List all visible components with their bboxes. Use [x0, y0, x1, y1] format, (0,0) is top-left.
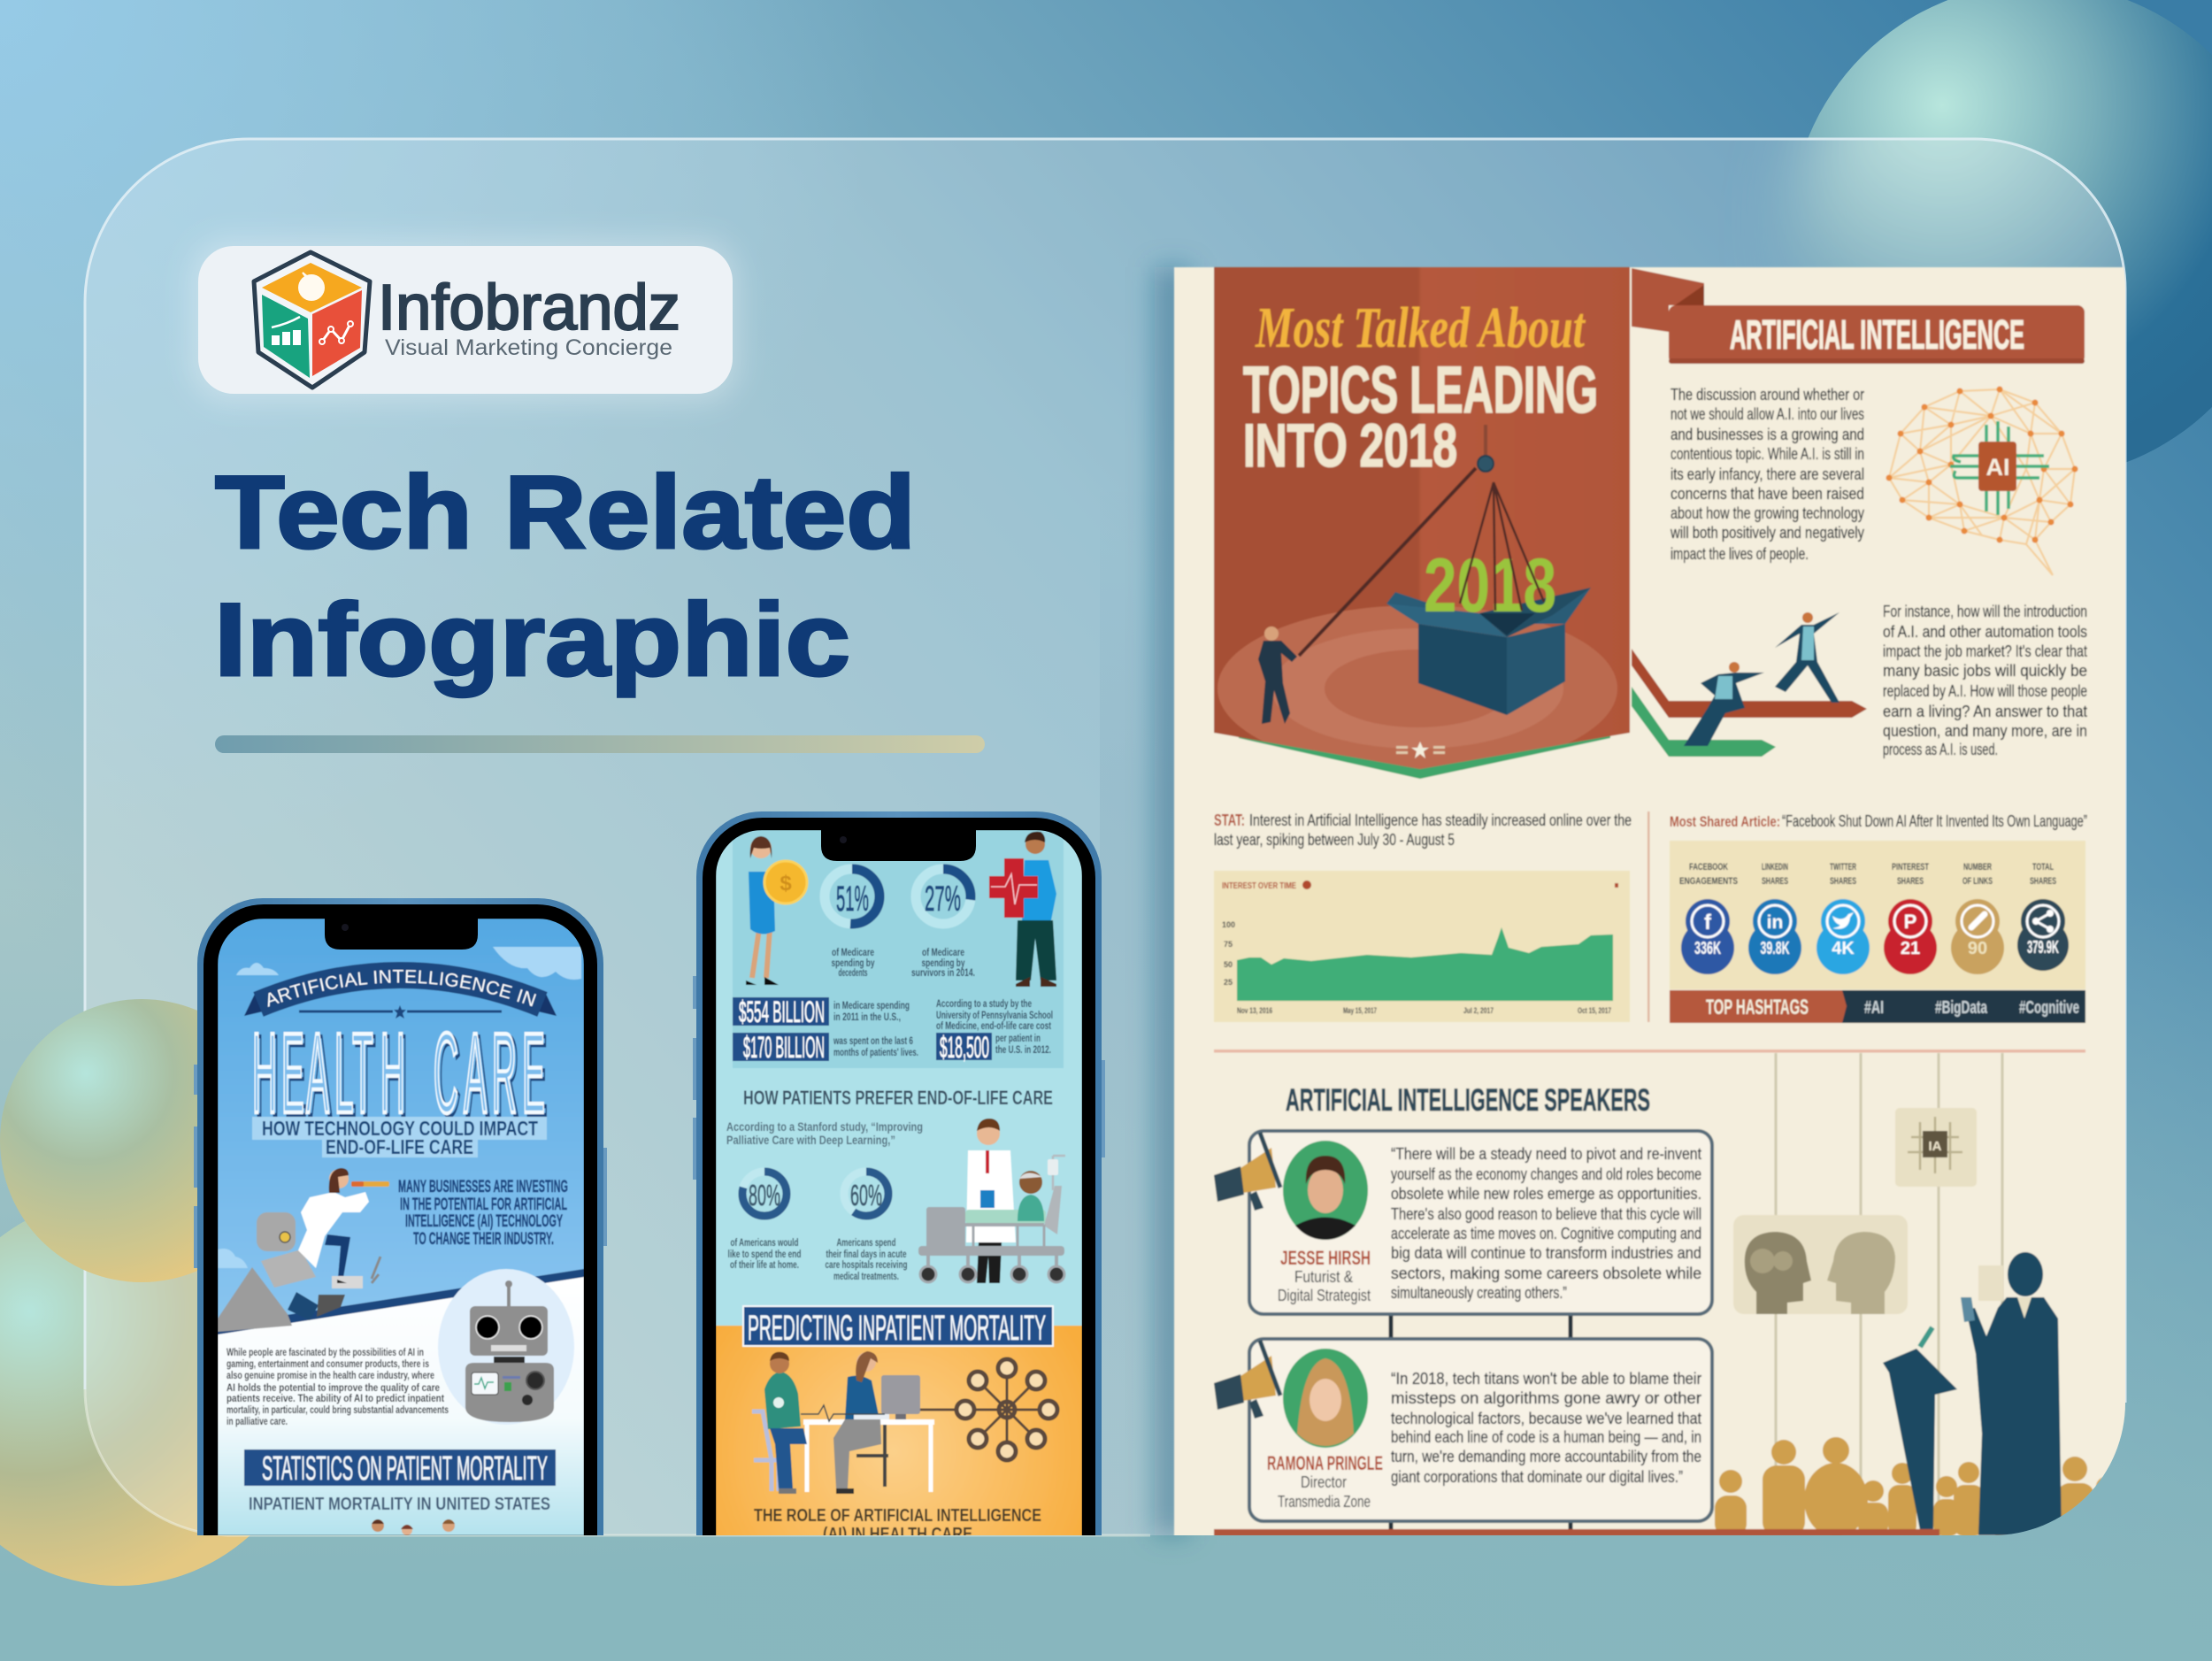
donut: 27 percent: 27% [925, 880, 961, 919]
stat: 170 billion: $170 BILLION [743, 1031, 825, 1065]
runner: rear [1684, 662, 1764, 746]
speaker card: Jesse Hirsh [1214, 1131, 1712, 1314]
share: pinterest: 21 [1901, 939, 1920, 958]
stat: 170 billion: was spent on the last 6 [833, 1034, 913, 1047]
stat text: STAT: [1214, 811, 1245, 829]
donut captions [832, 946, 975, 979]
role of AI heading: (AI) IN HEALTH CARE [823, 1525, 972, 1544]
paragraph: intro: not we should allow A.I. into our lives [1671, 405, 1864, 423]
paragraph: AI holds the potential to improve the quality of care [227, 1381, 440, 1394]
predicting heading [743, 1306, 1053, 1348]
interest over time chart: 50 [1224, 960, 1233, 969]
quote: “There will be a steady need to pivot and re-invent [1391, 1145, 1701, 1163]
intro caps text: IN THE POTENTIAL FOR ARTIFICIAL [400, 1196, 567, 1214]
interest over time chart: Jul 2, 2017 [1463, 1006, 1494, 1015]
quote: technological factors, because we've learned that [1391, 1410, 1701, 1427]
paragraph: for instance: impact the job market? It's clear that [1883, 642, 2087, 660]
quote: “In 2018, tech titans won't be able to blame their [1391, 1370, 1701, 1388]
quote: turn, we're demanding more accountability from the [1391, 1448, 1701, 1465]
quote [1391, 1370, 1701, 1486]
interest over time chart: INTEREST OVER TIME [1222, 881, 1296, 891]
robot head badge [438, 1269, 574, 1425]
donut: 80 percent [742, 1172, 787, 1216]
stanford text: According to a Stanford study, “Improving [726, 1119, 923, 1134]
paragraph: intro [1670, 386, 1864, 563]
share: total: SHARES [2030, 876, 2056, 887]
share: facebook: ENGAGEMENTS [1679, 876, 1738, 887]
speaker name: Transmedia Zone [1278, 1493, 1371, 1511]
phone: health care infographic [194, 898, 607, 1535]
interest over time chart: 75 [1224, 940, 1233, 949]
stat: 18,500: According to a study by the [936, 997, 1032, 1010]
title [214, 454, 916, 697]
grey robot arm [218, 1212, 345, 1332]
speaker name [1278, 1247, 1371, 1304]
clouds [218, 947, 581, 1268]
megaphone [1214, 1341, 1280, 1419]
phone side buttons [693, 976, 1105, 1180]
logo icon: cube hexagon [254, 252, 370, 388]
donut captions: spending by [922, 957, 965, 969]
stanford text [726, 1119, 923, 1147]
share: total: 379.9K [2027, 938, 2059, 957]
subtitle: HOW TECHNOLOGY COULD IMPACT [262, 1117, 538, 1140]
logo wordmark: Infobrandz [378, 273, 680, 343]
speaker name: Digital Strategist [1278, 1287, 1371, 1304]
donut: 51 percent: 51% [836, 880, 869, 919]
paragraph: gaming, entertainment and consumer products, there is [227, 1357, 429, 1370]
stat: 18,500: University of Pennsylvania School [936, 1009, 1053, 1021]
phone screen [716, 830, 1082, 1544]
pulley and ropes [1299, 425, 1544, 656]
small people heads [372, 1519, 455, 1535]
sphere: lower left [0, 1196, 314, 1586]
paragraph: for instance: of A.I. and other automation tools [1883, 623, 2087, 641]
quote: missteps on algorithms gone awry or other [1391, 1389, 1701, 1407]
share: facebook: FACEBOOK [1689, 862, 1728, 873]
megaphone [1214, 1133, 1280, 1211]
intro caps text: MANY BUSINESSES ARE INVESTING [398, 1178, 568, 1196]
paragraph: intro: about how the growing technology [1671, 504, 1864, 522]
role of AI heading [754, 1506, 1041, 1544]
runner: front [1775, 612, 1839, 703]
paragraph: intro: contentious topic. While A.I. is still in [1671, 445, 1864, 463]
stat: 554 billion: in Medicare spending [833, 999, 910, 1011]
quote: big data will continue to transform industries and [1391, 1244, 1701, 1262]
phone screen: PREDICTING INPATIENT MORTALITY [748, 1309, 1046, 1348]
share: twitter [1816, 862, 1870, 974]
title: Infographic [214, 581, 850, 697]
share: linkedin [1748, 862, 1801, 974]
donut captions [727, 1236, 908, 1282]
paragraph: patients receive. The ability of AI to predict inpatient [227, 1392, 444, 1404]
card bottom-left border [85, 1389, 1150, 1535]
paragraph: for instance: earn a living? An answer to that [1883, 703, 2087, 720]
stat text [1214, 811, 1632, 849]
donut captions: like to spend the end [727, 1248, 802, 1260]
poster headline: TOPICS LEADING [1243, 353, 1598, 427]
most shared article [1670, 812, 2087, 830]
quote: sectors, making some careers obsolete while [1391, 1265, 1701, 1282]
donut captions: Americans spend [837, 1236, 895, 1249]
share: facebook: 336K [1694, 939, 1721, 958]
share: linkedin: in [1767, 912, 1783, 933]
share: links [1951, 862, 2004, 974]
top hashtags bar: #AI [1864, 998, 1884, 1018]
interest over time chart [1214, 871, 1630, 1022]
paragraph: for instance: For instance, how will the introduction [1883, 603, 2087, 620]
phone notch [821, 827, 976, 861]
mortality subheading: INPATIENT MORTALITY IN UNITED STATES [249, 1495, 550, 1514]
stanford text: Palliative Care with Deep Learning,” [726, 1133, 895, 1147]
share: pinterest [1884, 862, 1937, 974]
crowd silhouettes [1715, 1437, 2119, 1537]
sphere: top right [1790, 0, 2212, 479]
statistics heading [244, 1450, 556, 1488]
quote: behind each line of code is a human being — and, in [1391, 1428, 1701, 1446]
logo glow [190, 239, 739, 403]
subtitle [252, 1117, 547, 1158]
role of AI heading: THE ROLE OF ARTIFICIAL INTELLIGENCE [754, 1506, 1041, 1526]
speaker name [1267, 1452, 1383, 1511]
poster: most talked about topics [1174, 267, 2130, 1537]
man with medical cross [989, 832, 1056, 987]
paragraph: for instance [1883, 603, 2087, 758]
share: links: 90 [1968, 939, 1987, 958]
desk scene [752, 1351, 934, 1494]
interest over time chart: May 15, 2017 [1343, 1006, 1377, 1015]
stat text: Interest in Artificial Intelligence has steadily increased online over the [1249, 811, 1632, 829]
hub icon [920, 1359, 1057, 1460]
heads tile [1733, 1215, 1908, 1314]
speaker name: Futurist & [1294, 1268, 1353, 1286]
phone side buttons [194, 1065, 607, 1268]
red banner panel [1214, 267, 1630, 779]
paragraph: also genuine promise in the health care industry, where [227, 1369, 434, 1381]
chip tile [1895, 1108, 1977, 1187]
logo plate [198, 246, 733, 394]
bottom red strip [1214, 1529, 1939, 1536]
share: total: TOTAL [2032, 862, 2054, 873]
quote: There's also good reason to believe that this cycle will [1391, 1205, 1701, 1223]
doctor and patient bed [918, 1119, 1065, 1283]
intro caps text: TO CHANGE THEIR INDUSTRY. [413, 1230, 554, 1249]
most shared article: Most Shared Article: [1670, 813, 1780, 830]
top hashtags bar: #Cognitive [2019, 998, 2079, 1018]
quote: obsolete while new roles emerge as opportunities. [1391, 1185, 1701, 1203]
donut captions: spending by [832, 957, 875, 969]
speaker name: Director [1301, 1473, 1347, 1491]
star divider [299, 1005, 502, 1019]
donut captions: of their life at home. [730, 1258, 799, 1271]
donut: 60 percent: 60% [850, 1179, 882, 1211]
banner star ornament [1396, 742, 1445, 758]
share: twitter: TWITTER [1830, 862, 1856, 873]
paragraph: for instance: process as A.I. is used. [1883, 741, 1998, 758]
doctor with telescope [298, 1168, 389, 1288]
donut captions: their final days in acute [826, 1248, 907, 1260]
quote: simultaneously creating others.” [1391, 1284, 1567, 1302]
ribbon fold [1632, 268, 1704, 332]
front camera [342, 924, 349, 931]
paragraph: intro: will both positively and negatively [1670, 524, 1864, 542]
brain network icon [1886, 386, 2078, 575]
donut captions: decedents [839, 966, 868, 979]
donut captions: care hospitals receiving [825, 1258, 908, 1271]
share: facebook [1679, 862, 1738, 974]
paragraph: intro: and businesses is a growing and [1671, 426, 1864, 443]
phone notch [325, 916, 478, 950]
paragraph: for instance: replaced by A.I. How will those people [1883, 682, 2087, 700]
portrait [1283, 1349, 1368, 1448]
top hashtags bar [1670, 990, 2085, 1023]
poster headline [1242, 306, 1597, 469]
share: linkedin: 39.8K [1761, 939, 1790, 958]
man pulling rope [1258, 627, 1297, 724]
poster drop shadow [1155, 267, 1190, 1535]
share: total [2017, 862, 2069, 971]
speaker silhouette at podium [1883, 1252, 2062, 1535]
paragraph: intro: its early infancy, there are several [1671, 465, 1864, 483]
top hashtags bar: #BigData [1935, 998, 1988, 1018]
speaker card: Ramona Pringle [1214, 1339, 1712, 1521]
most shared article: “Facebook Shut Down AI After It Invented Its Own Language” [1782, 812, 2087, 830]
quote: yourself as the economy changes and old roles become [1391, 1165, 1701, 1183]
stat text: last year, spiking between July 30 - August 5 [1214, 831, 1455, 849]
glass card [85, 139, 2122, 1535]
heading: artificial intelligence [1669, 305, 2085, 364]
donut: 51 percent [825, 869, 879, 924]
phone screen [218, 919, 584, 1535]
share: twitter: 4K [1832, 939, 1855, 958]
paragraph: in palliative care. [227, 1415, 288, 1427]
donut: 27 percent [916, 869, 971, 924]
title: Tech Related [215, 454, 916, 570]
donut captions: medical treatments. [833, 1270, 899, 1282]
poster headline: INTO 2018 [1243, 411, 1457, 480]
quote: giant corporations that dominate our digital lives.” [1391, 1468, 1683, 1486]
phone: end-of-life care infographic [693, 811, 1105, 1614]
open box [1386, 588, 1591, 715]
woman with coin: $ [780, 872, 792, 896]
sphere: middle left [0, 999, 283, 1282]
speaker name: JESSE HIRSH [1280, 1247, 1371, 1269]
front camera [840, 836, 847, 843]
quote: accelerate as time moves on. Cognitive computing and [1391, 1225, 1701, 1242]
donut captions: of Medicare [922, 946, 964, 958]
title underline bar [215, 735, 985, 753]
interest over time chart: 100 [1222, 920, 1235, 929]
share: facebook: f [1704, 911, 1712, 934]
arrows with runners [1632, 612, 1867, 757]
speaker name: RAMONA PRINGLE [1267, 1452, 1383, 1474]
subtitle: END-OF-LIFE CARE [326, 1135, 473, 1158]
share: links: NUMBER [1963, 862, 1992, 873]
donut: 60 percent [844, 1172, 888, 1216]
green 2018: 2018 [1424, 543, 1556, 628]
interest over time chart: Oct 15, 2017 [1578, 1006, 1611, 1015]
woman with coin [746, 836, 807, 985]
share: linkedin: SHARES [1762, 876, 1788, 887]
logo tagline: Visual Marketing Concierge [385, 335, 672, 360]
portrait [1283, 1141, 1368, 1240]
brain network icon: AI [1985, 454, 2010, 481]
paragraph: intro: The discussion around whether or [1671, 386, 1864, 404]
stat: 18,500: $18,500 [940, 1031, 989, 1065]
heading: how patients prefer: HOW PATIENTS PREFER END-OF-LIFE CARE [743, 1087, 1053, 1109]
arc banner: ARTIFICIAL INTELLIGENCE IN [267, 969, 537, 1008]
HEALTH CARE title: HEALTH CARE [255, 1013, 548, 1140]
share: pinterest: SHARES [1897, 876, 1924, 887]
paragraph [227, 1346, 449, 1427]
share: pinterest: P [1904, 911, 1916, 933]
paragraph: intro: concerns that have been raised [1671, 485, 1864, 503]
paragraph: mortality, in particular, could bring substantial advancements [227, 1403, 449, 1416]
chip tile: IA [1929, 1139, 1942, 1154]
quote [1391, 1145, 1701, 1302]
interest over time chart: 25 [1224, 978, 1233, 987]
share: pinterest: PINTEREST [1892, 862, 1929, 873]
HEALTH CARE title: HEALTH CARE [252, 1011, 545, 1137]
donut: 80 percent: 80% [749, 1179, 780, 1211]
stat: 554 billion: in 2011 in the U.S., [833, 1011, 901, 1023]
intro caps text: INTELLIGENCE (AI) TECHNOLOGY [405, 1212, 563, 1231]
stat: 18,500 [936, 997, 1053, 1065]
share: linkedin: LINKEDIN [1762, 862, 1788, 873]
card border [85, 139, 2125, 1403]
stat: 18,500: per patient in [995, 1032, 1041, 1044]
stat: 18,500: the U.S. in 2012. [995, 1043, 1051, 1056]
stat: 170 billion: months of patients' lives. [833, 1046, 918, 1058]
top hashtags bar: TOP HASHTAGS [1706, 996, 1809, 1019]
paragraph: While people are fascinated by the possibilities of AI in [227, 1346, 424, 1358]
phone screen: STATISTICS ON PATIENT MORTALITY [262, 1450, 548, 1488]
interest over time chart: Nov 13, 2016 [1237, 1006, 1272, 1015]
paragraph: intro: impact the lives of people. [1671, 545, 1809, 563]
paragraph: for instance: many basic jobs will quickly be [1883, 662, 2087, 680]
donut captions: survivors in 2014. [911, 966, 975, 979]
intro caps text [398, 1178, 568, 1249]
donut captions: of Medicare [832, 946, 874, 958]
orange section [716, 1326, 1082, 1538]
poster headline: Most Talked About [1255, 296, 1586, 360]
share stats panel [1670, 841, 2085, 989]
vertical divider [1647, 811, 1649, 1022]
donut captions: of Americans would [731, 1236, 798, 1249]
paragraph: for instance: question, and many more, are in [1883, 722, 2087, 740]
stat: 18,500: of Medicine, end-of-life care cost [936, 1019, 1051, 1032]
share: twitter: SHARES [1830, 876, 1856, 887]
heading: speakers: ARTIFICIAL INTELLIGENCE SPEAKERS [1286, 1083, 1650, 1118]
share: links: OF LINKS [1962, 876, 1993, 887]
stat: 554 billion: $554 BILLION [739, 996, 825, 1029]
